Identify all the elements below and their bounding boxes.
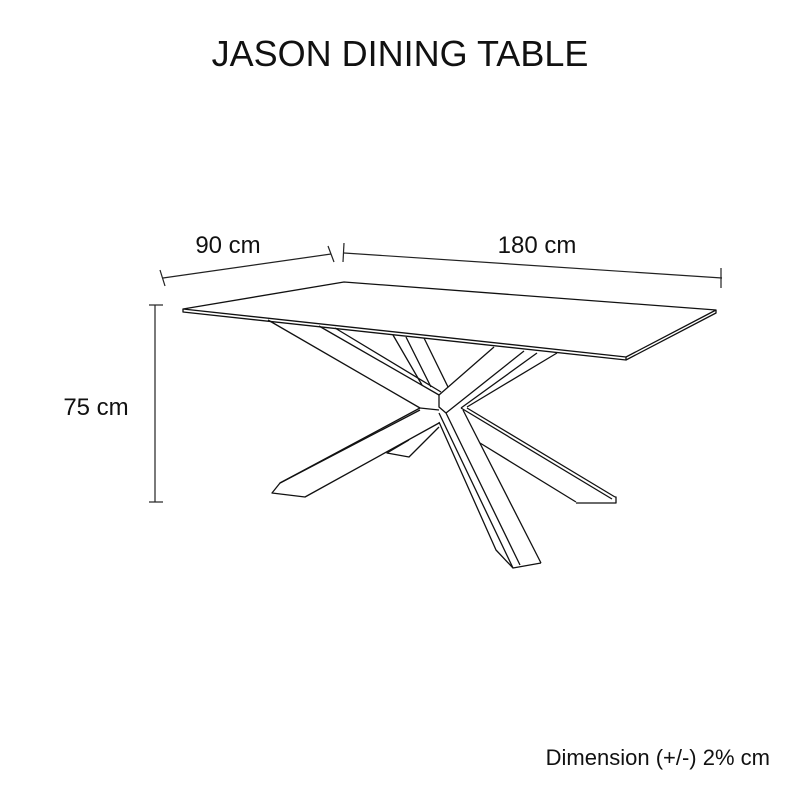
dimension: 180 cm: 180 cm bbox=[498, 232, 576, 259]
table drawing bbox=[183, 282, 716, 568]
dimension: 75 cm: 75 cm bbox=[63, 394, 129, 421]
title: JASON DINING TABLE bbox=[212, 33, 588, 74]
footnote: Dimension (+/-) 2% cm bbox=[546, 745, 770, 770]
dimension: 180 cm bbox=[343, 232, 722, 288]
dimension: 90 cm: 90 cm bbox=[195, 232, 261, 259]
legs bbox=[268, 320, 616, 568]
dimension: 90 cm bbox=[160, 232, 334, 286]
tabletop bbox=[183, 282, 716, 360]
